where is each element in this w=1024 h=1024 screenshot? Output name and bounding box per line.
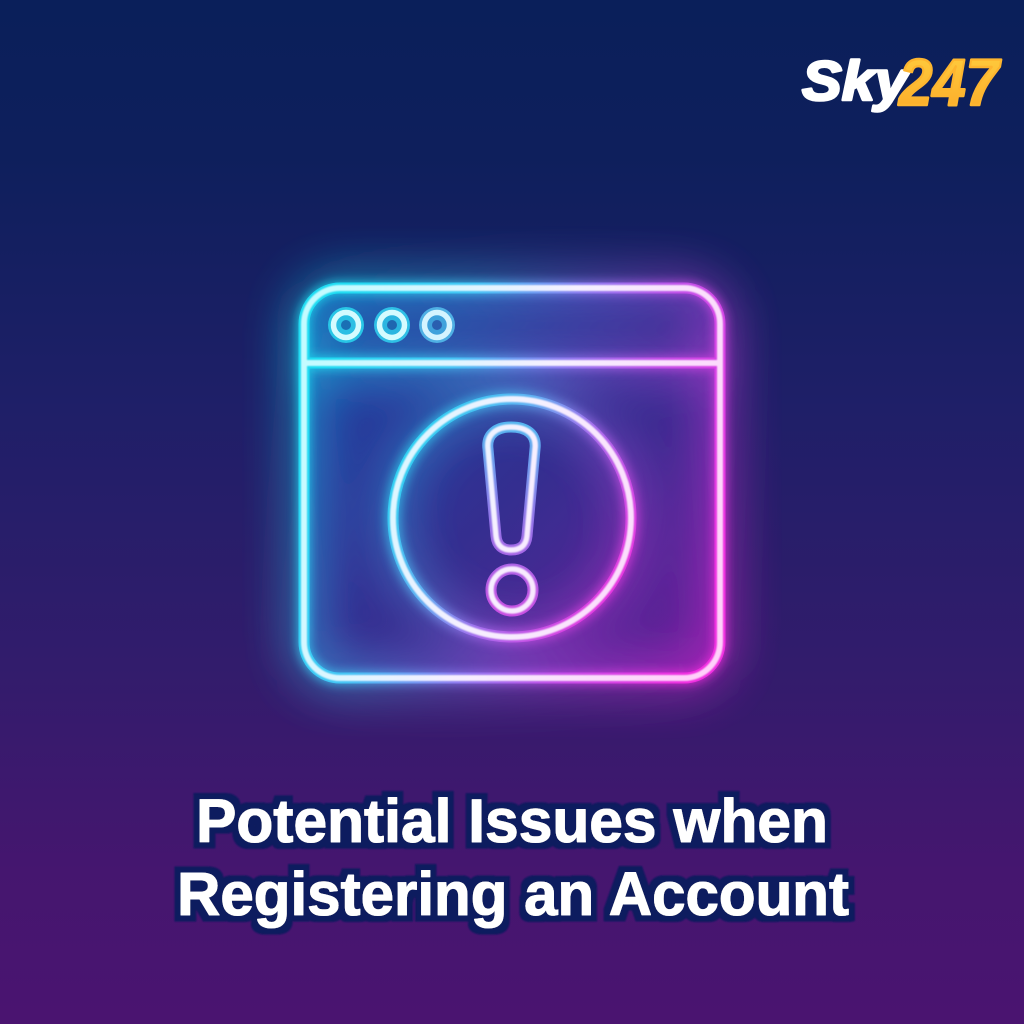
neon alert window icon xyxy=(304,288,720,678)
title: Registering an Account xyxy=(177,860,849,928)
title: Potential Issues when xyxy=(196,787,828,855)
three window dots xyxy=(328,307,455,343)
outer glow xyxy=(304,288,720,678)
logo: Sky247: 247 xyxy=(897,45,1002,119)
title xyxy=(177,787,849,928)
logo: Sky247 xyxy=(802,45,1002,119)
warning circle xyxy=(393,399,631,637)
window interior xyxy=(304,288,720,678)
window frame with title bar xyxy=(304,288,720,678)
exclamation mark xyxy=(488,427,535,611)
logo: Sky247: Sky xyxy=(802,49,911,112)
